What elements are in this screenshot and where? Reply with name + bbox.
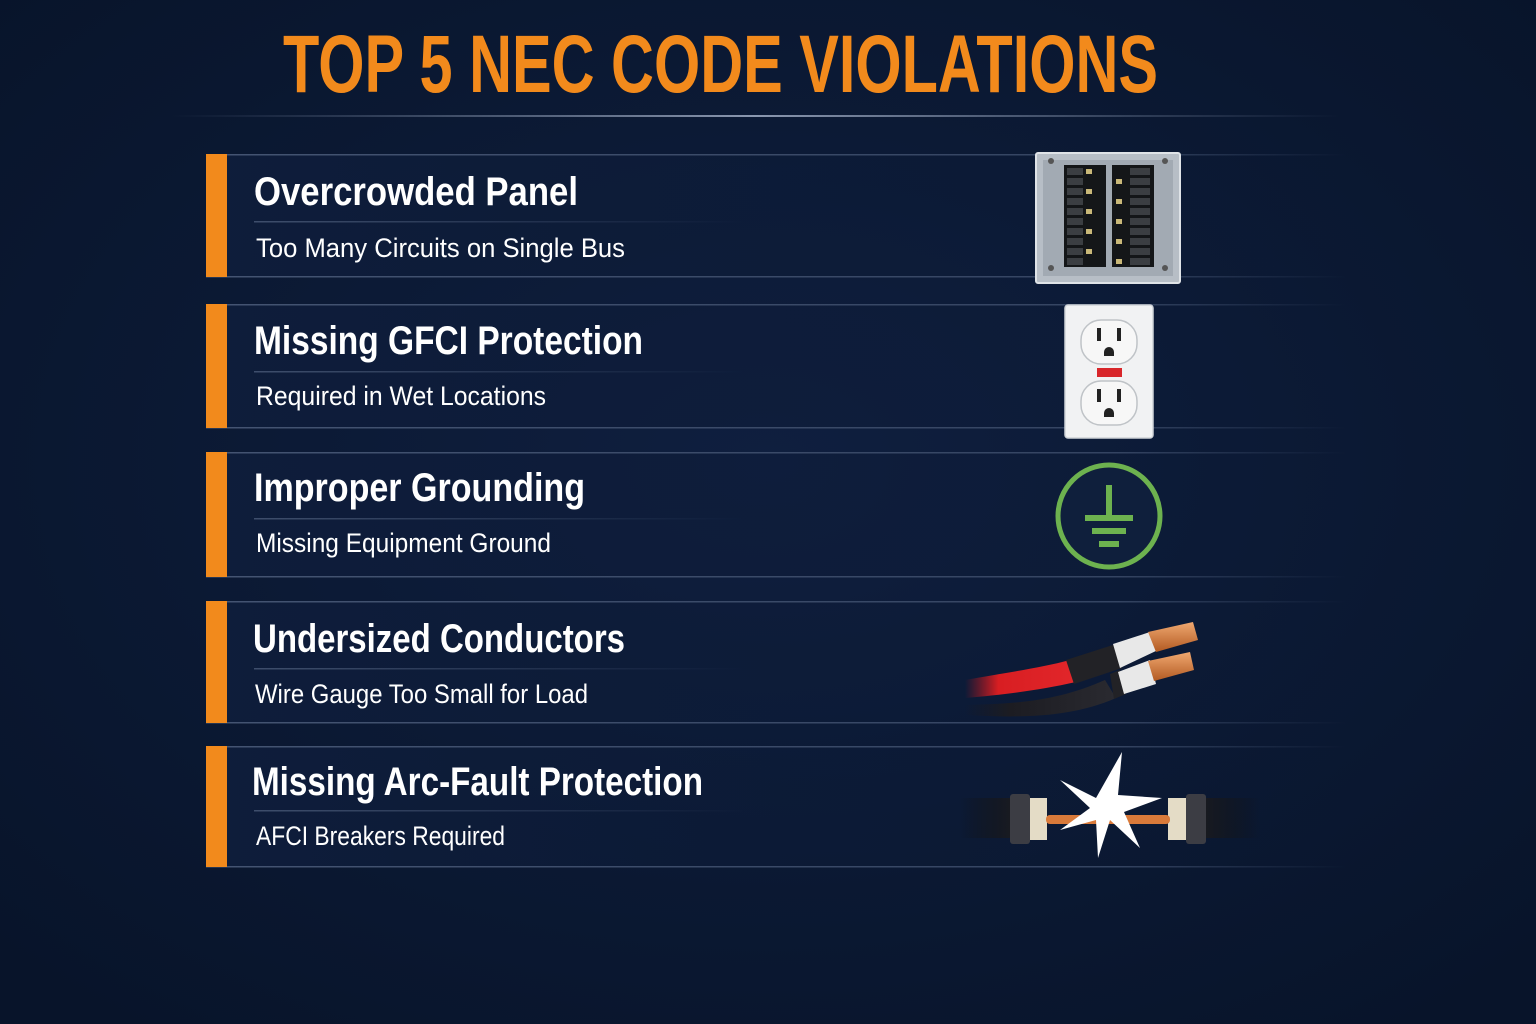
icon: ground symbol [1058, 465, 1160, 567]
panel: row 5 missing arc-fault [206, 746, 1346, 868]
accent bar [206, 452, 227, 577]
heading: Overcrowded Panel [254, 170, 578, 214]
accent bar [206, 154, 227, 277]
icon: arc fault [960, 752, 1260, 858]
panel: row 3 improper grounding [206, 452, 1346, 578]
title: TOP 5 NEC CODE VIOLATIONS [283, 19, 1158, 110]
accent bar [206, 304, 227, 428]
heading: Undersized Conductors [253, 617, 625, 661]
heading: Improper Grounding [254, 466, 585, 510]
accent bar [206, 746, 227, 867]
accent bar [206, 601, 227, 723]
icon: electrical panel [1036, 153, 1180, 283]
heading: Missing GFCI Protection [254, 319, 643, 363]
panel: row 4 undersized conductors [206, 601, 1346, 724]
icon: wires [965, 622, 1198, 716]
panel: row 2 missing GFCI [206, 304, 1346, 438]
subtitle: Too Many Circuits on Single Bus [256, 233, 625, 263]
subtitle: Required in Wet Locations [256, 381, 546, 411]
subtitle: Missing Equipment Ground [256, 528, 551, 558]
icon: GFCI outlet [1065, 305, 1153, 438]
subtitle: AFCI Breakers Required [256, 821, 505, 851]
heading: Missing Arc-Fault Protection [252, 760, 703, 804]
subtitle: Wire Gauge Too Small for Load [255, 679, 588, 709]
panel: row 1 overcrowded panel [206, 153, 1346, 283]
